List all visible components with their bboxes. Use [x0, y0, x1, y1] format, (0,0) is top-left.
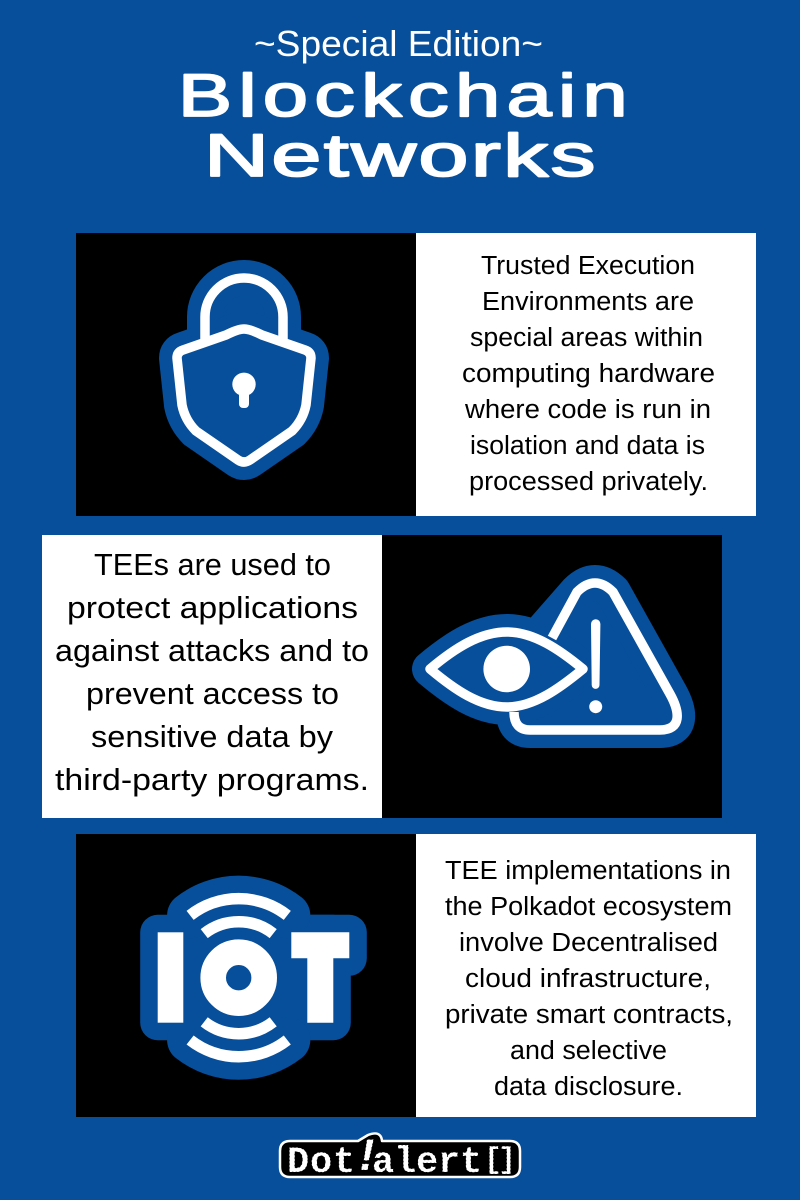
logo: Dot!alert[]: ! [353, 1132, 381, 1184]
text card [416, 233, 756, 516]
text card: against attacks and to [55, 634, 369, 668]
logo: Dot!alert[]: Dot [287, 1142, 355, 1184]
text card: TEEs are used to [94, 548, 331, 582]
text card: third-party programs. [55, 763, 369, 797]
panel: polkadot implementations [76, 834, 756, 1117]
title: Networks [204, 123, 596, 189]
text card: data disclosure. [494, 1073, 683, 1101]
subtitle: ~Special Edition~ [254, 23, 543, 64]
text card: computing hardware [462, 360, 715, 388]
text card: isolation and data is [470, 432, 705, 460]
panel: trusted execution environments [76, 233, 756, 516]
text card: Environments are [482, 288, 694, 316]
text card: protect applications [67, 591, 358, 625]
text card: cloud infrastructure, [465, 965, 711, 993]
logo: Dot!alert[]: [] [484, 1144, 516, 1178]
text card: where code is run in [464, 396, 711, 424]
text card: sensitive data by [91, 720, 334, 754]
icon panel: black background with IoT [76, 834, 416, 1117]
icon panel: black background with eye and warning [382, 535, 722, 818]
logo: Dot!alert[] [280, 1132, 520, 1184]
text card: the Polkadot ecosystem [445, 893, 732, 921]
panel: protection against attacks [42, 535, 722, 818]
text card: Trusted Execution [481, 252, 695, 280]
icon: IoT signal [158, 899, 349, 1057]
title: Blockchain [178, 62, 628, 129]
text card: special areas within [470, 324, 703, 352]
text card: involve Decentralised [459, 929, 718, 957]
icon panel: black background with lock [76, 233, 416, 516]
title [178, 62, 628, 189]
icon: padlock shield [177, 278, 311, 462]
text card [42, 535, 382, 818]
text card: processed privately. [469, 468, 708, 496]
logo: Dot!alert[]: alert [372, 1142, 482, 1184]
icon: eye and warning triangle [430, 583, 677, 730]
text card: TEE implementations in [445, 857, 731, 885]
text card [416, 834, 756, 1117]
text card: private smart contracts, [445, 1001, 733, 1029]
text card: and selective [510, 1037, 667, 1065]
text card: prevent access to [86, 677, 339, 711]
